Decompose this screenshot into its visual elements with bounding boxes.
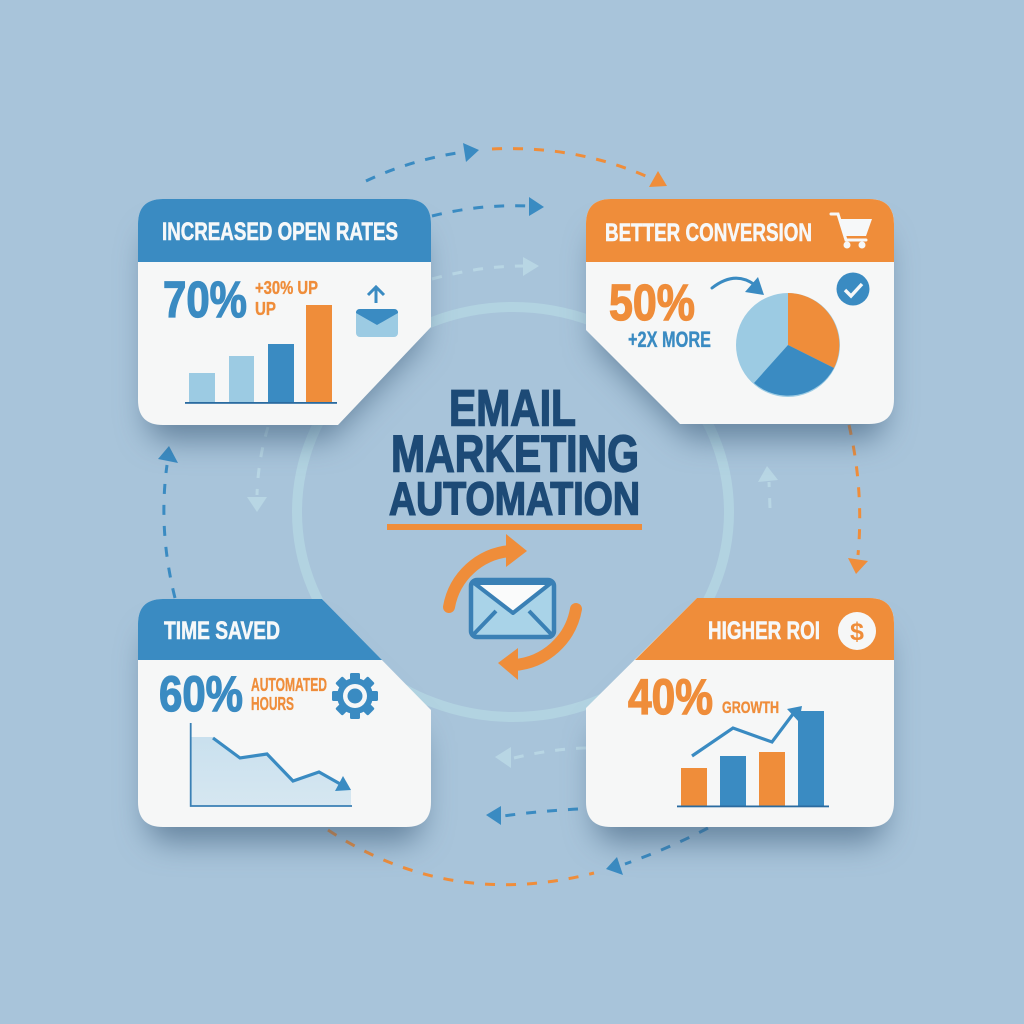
arrow: blue to better conversion <box>432 197 544 216</box>
panel: time saved <box>138 599 431 827</box>
header bar <box>586 199 894 262</box>
panel: higher ROI <box>586 598 894 827</box>
cycle arrows <box>158 143 868 885</box>
arrow: faint left of higher ROI <box>495 747 586 768</box>
area chart <box>191 723 352 806</box>
heading: TIME SAVED <box>164 617 280 645</box>
bar chart with trend arrow <box>677 706 829 807</box>
arrow: curved to pie <box>712 277 764 295</box>
stat 50%: 50% <box>609 274 695 331</box>
title underline <box>387 524 642 530</box>
arrow: blue bottom right <box>606 828 708 875</box>
heading: BETTER CONVERSION <box>605 219 812 247</box>
stat note: UP <box>255 299 276 319</box>
arrow: faint down left of ring <box>247 427 268 512</box>
heading: HIGHER ROI <box>708 617 820 645</box>
bar chart <box>185 305 337 404</box>
title <box>389 380 640 524</box>
stat note: AUTOMATED <box>251 675 327 695</box>
arrow: faint up right of ring <box>758 466 778 508</box>
icon: cart <box>831 214 872 248</box>
title: MARKETING <box>391 426 639 484</box>
arrow: orange down right <box>848 425 868 574</box>
arrow: blue left arc <box>158 446 178 598</box>
pie chart <box>736 293 840 397</box>
header bar <box>138 599 382 660</box>
stat note <box>255 278 318 319</box>
icon: email with cycle arrows <box>449 534 576 680</box>
title: EMAIL <box>449 380 576 436</box>
stat note: GROWTH <box>722 698 779 717</box>
title: AUTOMATION <box>389 472 640 524</box>
heading: INCREASED OPEN RATES <box>162 218 398 246</box>
arrow: faint to better conversion <box>432 257 539 279</box>
arrow: top blue arc <box>366 143 479 181</box>
icon: gear <box>332 673 378 719</box>
stat note: +30% UP <box>255 278 318 298</box>
stat 60%: 60% <box>159 666 243 722</box>
header bar <box>138 199 431 262</box>
panel: better conversion <box>586 199 894 424</box>
stat note: HOURS <box>251 694 294 714</box>
icon: dollar coin <box>838 612 876 650</box>
stat 70%: 70% <box>163 271 247 328</box>
arrow: blue left of higher ROI <box>486 806 578 825</box>
arrow: orange bottom arc <box>328 830 594 885</box>
stat note: +2X MORE <box>628 327 711 352</box>
stat 40%: 40% <box>628 669 713 725</box>
icon: envelope with up arrow <box>356 287 398 337</box>
panel: increased open rates <box>138 199 431 425</box>
arrow: top orange arc <box>492 149 667 187</box>
central ring <box>297 307 729 717</box>
stat note <box>251 675 327 714</box>
header bar <box>635 598 894 660</box>
icon: check badge <box>836 272 870 306</box>
icon: dollar coin: $ <box>850 618 864 646</box>
